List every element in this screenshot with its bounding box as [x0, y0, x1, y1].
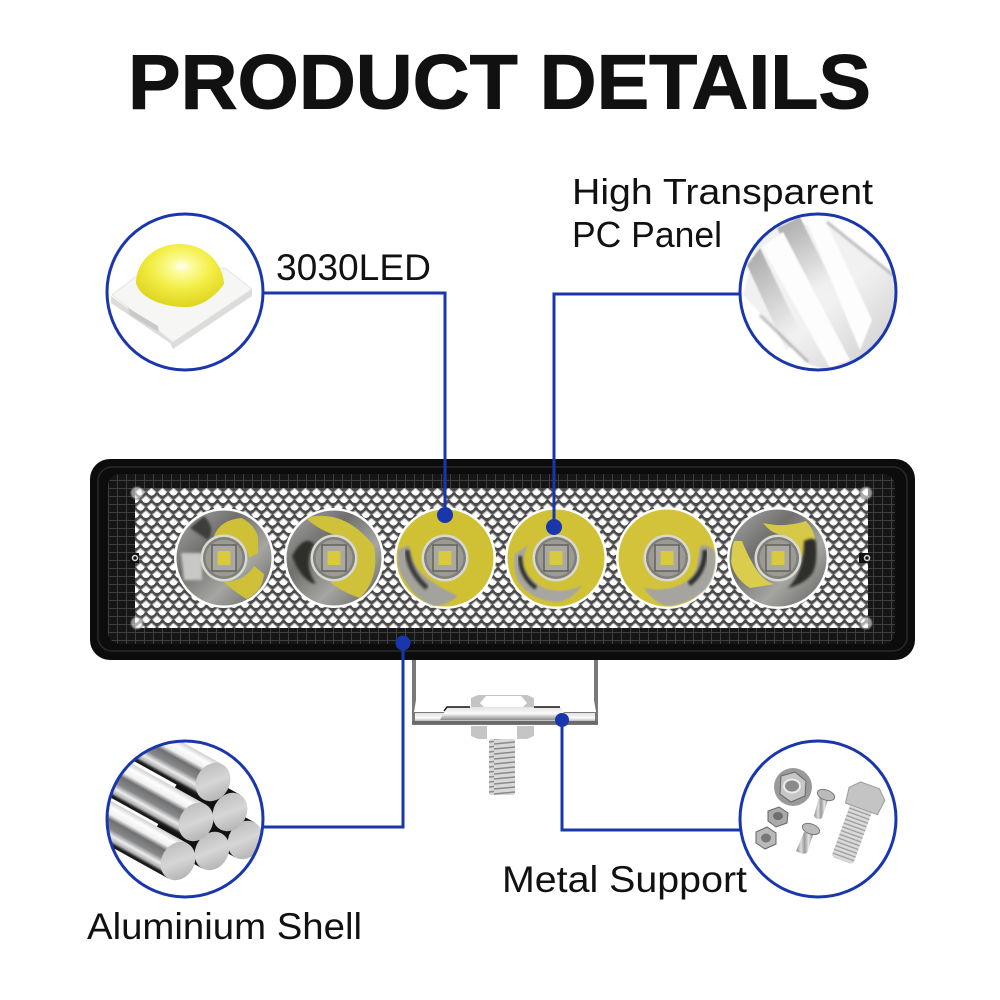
lens 3 — [394, 507, 496, 609]
leader dot: shell — [396, 636, 410, 650]
light bar housing — [90, 459, 915, 660]
lower nut — [471, 726, 534, 739]
leader line: LED — [263, 293, 445, 515]
large bolt — [825, 779, 888, 867]
rivet upper — [814, 797, 828, 819]
rivet lower — [796, 832, 813, 854]
infographic canvas — [87, 54, 915, 940]
callout: PC panel — [546, 171, 900, 535]
label: High Transparent PC Panel: High Transparent — [572, 171, 873, 212]
flange nut — [774, 768, 812, 806]
lens 4 — [505, 507, 607, 609]
small nut lower — [756, 827, 776, 849]
label: High Transparent PC Panel — [572, 171, 873, 255]
label: High Transparent PC Panel: PC Panel — [572, 214, 722, 255]
mounting plate — [440, 707, 566, 720]
leader dot: support — [555, 713, 569, 727]
title: PRODUCT DETAILS — [128, 40, 871, 126]
callout: metal support — [502, 713, 896, 900]
callout: aluminium shell — [87, 636, 410, 940]
metal mounting bracket — [412, 660, 598, 795]
circle: nuts and bolts — [740, 741, 896, 897]
lens 2 — [284, 508, 384, 608]
callout: 3030LED — [107, 214, 453, 523]
leader line: shell — [263, 643, 403, 827]
mesh reflector — [135, 488, 868, 628]
circle: LED chip — [107, 214, 263, 370]
lens 1 — [174, 508, 274, 608]
label: Aluminium Shell: Aluminium Shell — [87, 906, 362, 947]
right screw mark — [859, 553, 870, 563]
small nut upper — [768, 807, 788, 827]
leader dot: PC panel — [546, 519, 562, 535]
label: 3030LED: 3030LED — [276, 247, 431, 288]
upper nut — [471, 695, 534, 708]
leader line: support — [562, 720, 740, 830]
lens 5 — [616, 507, 718, 609]
label: Metal Support: Metal Support — [502, 859, 748, 900]
circle: PC panel — [740, 213, 900, 375]
leader dot: LED — [437, 507, 453, 523]
left screw mark — [130, 553, 139, 563]
circle: aluminium rods — [106, 740, 264, 898]
bolt thread — [489, 739, 515, 795]
corner posts — [131, 487, 872, 629]
lens 6 — [727, 507, 829, 609]
leader line: PC panel — [554, 294, 739, 527]
